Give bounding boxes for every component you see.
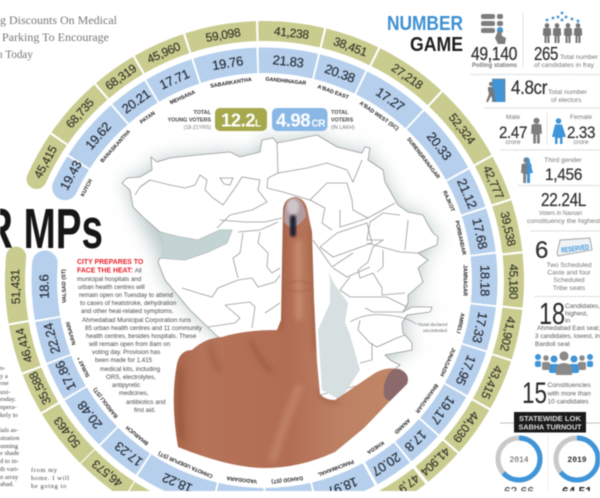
constituency labels: BHAVNAGAR bbox=[414, 382, 439, 414]
outer ring values: 59,098 bbox=[205, 25, 242, 45]
sea: gulf of khambhat bbox=[318, 272, 360, 400]
constituency labels: BHARUCH bbox=[125, 424, 150, 446]
stat: constituencies with more than ten candidates: with more than bbox=[546, 390, 591, 398]
outer ring values: 46,414 bbox=[13, 326, 35, 364]
stat: navsari voters: constituency the highest bbox=[527, 218, 600, 225]
cropped left column article: n- bbox=[0, 365, 5, 372]
outer ring values: 38,451 bbox=[331, 34, 370, 60]
stat: male electors: 2.47 bbox=[499, 123, 527, 142]
inner ring values: 19.17 bbox=[428, 393, 458, 427]
cropped left column article: e shade bbox=[0, 450, 19, 457]
constituency labels: NAVSARI bbox=[65, 320, 78, 346]
total young voters callout: YOUNG VOTERS bbox=[168, 118, 211, 124]
stat: candidates highest lowest: Bardoli seat bbox=[535, 341, 570, 348]
stat: candidates in fray: 265 bbox=[534, 44, 558, 64]
donut: 2014 turnout: 2014 bbox=[509, 456, 529, 465]
outer ring values: 41,902 bbox=[497, 315, 518, 353]
stat: reserved seats: Caste and four bbox=[547, 270, 591, 276]
constituency labels: MEHSANA bbox=[169, 90, 197, 106]
stat: navsari voters: Voters in Navsari bbox=[539, 210, 582, 217]
heat advisory article: been made for 1,415 bbox=[95, 357, 153, 364]
constituency labels: RAJKOT bbox=[441, 190, 456, 213]
footnote leader: surat uncontested: *Surat declared bbox=[417, 322, 448, 327]
stat: female electors: Female bbox=[570, 114, 592, 121]
icon: reserved sign: RESERVED bbox=[561, 242, 590, 255]
heading: statewide lok sabha turnout bbox=[500, 412, 600, 432]
constituency labels: PANCHMAHAL bbox=[316, 458, 354, 477]
total voters callout bbox=[272, 108, 355, 131]
constituency labels: A'BAD EAST bbox=[316, 84, 350, 101]
outer ring values: 52,324 bbox=[446, 111, 478, 147]
heat advisory article: antibiotics and bbox=[126, 399, 166, 406]
inner ring values: 18.6 bbox=[36, 274, 52, 299]
ink mark bbox=[290, 215, 296, 237]
constituency labels: CHHOTA UDEPUR (ST) bbox=[157, 450, 214, 479]
donut: 2019 turnout: 2019 bbox=[567, 456, 587, 465]
headline fragment: top-left story deck: g Discounts On Medical bbox=[0, 13, 118, 27]
cropped quote column: from my bbox=[31, 467, 58, 474]
cropped left column article: y a bbox=[0, 373, 8, 380]
headline fragment: top-left story deck: Parking To Encourage bbox=[2, 30, 109, 44]
constituency labels: KUTCH bbox=[80, 178, 94, 198]
constituency labels: BARDOLI (ST) bbox=[92, 386, 120, 419]
inner ring values: 17.95 bbox=[453, 353, 479, 387]
icon: voting machine bbox=[481, 14, 506, 44]
inner ring values: 17.27 bbox=[373, 84, 407, 114]
outer ring values: 46,573 bbox=[89, 457, 125, 490]
cropped left column article: th vari- bbox=[0, 466, 19, 473]
constituency labels: JUNAGADH bbox=[438, 347, 456, 377]
cropped left column article: unning bbox=[0, 443, 19, 450]
stat: candidates highest lowest: 18 bbox=[539, 296, 565, 331]
inner ring: total voters per constituency in lakh bbox=[38, 48, 492, 494]
heat advisory article bbox=[77, 259, 203, 414]
title: number game bbox=[387, 15, 464, 52]
stat: third gender bbox=[521, 157, 582, 184]
total voters callout: 4.98CR bbox=[276, 110, 326, 130]
constituency labels: SURAT * bbox=[76, 355, 92, 378]
heat advisory article: to cases of heatstroke, dehydration bbox=[80, 300, 177, 307]
cropped quote column: home. I will bbox=[31, 475, 70, 482]
stat: third gender: Third gender bbox=[544, 157, 582, 164]
cropped quote column: be going to bbox=[31, 483, 67, 490]
inner ring values: 19.76 bbox=[211, 53, 244, 73]
cropped left column article: esday. bbox=[0, 396, 16, 403]
inner ring values: 19.43 bbox=[57, 158, 85, 193]
title: number game: NUMBER bbox=[387, 12, 463, 35]
footnote leader: surat uncontested bbox=[350, 315, 448, 333]
stat: candidates in fray bbox=[534, 12, 599, 69]
total voters callout: VOTERS bbox=[331, 118, 354, 124]
stat: electors: 4.8cr bbox=[511, 78, 548, 99]
constituency labels: DAHOD (ST) bbox=[271, 474, 303, 484]
heading: statewide lok sabha turnout: SABHA TURNOUT bbox=[518, 422, 582, 432]
stat: candidates highest lowest: Candidates, bbox=[565, 303, 600, 310]
heat advisory article: will remain open from 8am on bbox=[88, 341, 171, 348]
constituency labels: SABARKANTHA bbox=[210, 77, 252, 90]
donut: 2019 turnout bbox=[556, 438, 598, 498]
inner ring values: 20.33 bbox=[424, 129, 455, 163]
heat advisory article: ORS, electrolytes, bbox=[106, 374, 156, 381]
cropped left column article: d to in- bbox=[0, 458, 19, 465]
stat: reserved seats: Scheduled bbox=[553, 277, 585, 284]
heat advisory article: 85 urban health centres and 11 community bbox=[85, 325, 203, 332]
constituency labels: JAMNAGAR bbox=[462, 265, 468, 296]
constituency labels: KHEDA bbox=[365, 439, 385, 455]
stat: navsari voters: 22.24L bbox=[541, 190, 586, 210]
stat: candidates in fray: Total number bbox=[560, 54, 599, 61]
constituency labels: VALSAD (ST) bbox=[61, 269, 68, 303]
inner ring values: 18.18 bbox=[478, 265, 492, 296]
headline fragment: top-left story deck bbox=[0, 13, 118, 61]
photo: inked finger hand bbox=[174, 197, 408, 468]
cropped left column article: abad. bbox=[0, 481, 14, 488]
title: number game: GAME bbox=[410, 33, 463, 56]
stat: constituencies with more than ten candidates: 10 candidates bbox=[548, 398, 589, 406]
heat advisory article: Ahmedabad Municipal Corporation runs bbox=[82, 317, 191, 324]
stat: female electors bbox=[552, 114, 595, 146]
nail bbox=[284, 198, 306, 227]
total voters callout: TOTAL bbox=[331, 110, 349, 116]
stat: male electors: crore bbox=[505, 139, 521, 146]
stat: female electors: 2.33 bbox=[567, 123, 595, 142]
inner ring values: 19.62 bbox=[82, 119, 114, 152]
total young voters callout: TOTAL bbox=[194, 110, 212, 116]
finger crease bbox=[292, 280, 306, 292]
cropped left column article: stration bbox=[0, 435, 20, 442]
cropped left column article: uxi- bbox=[0, 389, 10, 396]
outer ring values: 45,180 bbox=[506, 264, 521, 300]
outer ring values: 68,735 bbox=[63, 95, 97, 131]
total young voters callout: (18-21YRS) bbox=[184, 125, 211, 131]
icon: third gender bbox=[521, 157, 533, 183]
outer ring values: 43,415 bbox=[478, 363, 505, 402]
icon: crowd with leader bbox=[535, 351, 593, 375]
constituency labels: ANAND bbox=[393, 417, 411, 435]
stat: reserved seats bbox=[535, 237, 592, 292]
outer ring values: 42,777 bbox=[480, 163, 507, 202]
stat: constituencies with more than ten candidates: 15 bbox=[522, 377, 547, 410]
stat: candidates highest lowest: highest, bbox=[565, 310, 588, 318]
heat advisory article: remain open on Tuesday to attend bbox=[79, 292, 173, 299]
district boundaries bbox=[135, 143, 418, 363]
stat: polling stations: Polling stations bbox=[472, 62, 517, 69]
stat: candidates in fray: of candidates in fray bbox=[534, 62, 595, 69]
inner ring values: 22.24 bbox=[40, 321, 63, 355]
stat: female electors: crore bbox=[573, 139, 589, 146]
inner ring values: 17.86 bbox=[52, 358, 79, 393]
stat: reserved seats: 6 bbox=[535, 237, 548, 264]
inner ring values: 20.38 bbox=[323, 61, 357, 86]
hand shading bbox=[180, 205, 340, 462]
constituency labels bbox=[61, 76, 468, 484]
outer ring values: 47,9 bbox=[396, 471, 422, 496]
inner ring values: 21.83 bbox=[272, 52, 304, 70]
heat advisory article: FACE THE HEAT: All bbox=[77, 268, 142, 274]
donut: 2014 turnout bbox=[498, 438, 540, 498]
constituency labels: PORBANDAR bbox=[453, 220, 467, 256]
heat advisory article: voting day. Provision has bbox=[92, 349, 160, 356]
outer ring values: 45,415 bbox=[31, 143, 60, 181]
stat: male electors bbox=[499, 114, 542, 146]
outer ring values: 68,319 bbox=[102, 61, 140, 93]
stat: reserved seats: Two Scheduled bbox=[546, 262, 592, 269]
total voters callout: (IN LAKH) bbox=[331, 125, 355, 131]
icon: person entering door bbox=[486, 79, 505, 102]
footnote leader: surat uncontested: uncontested bbox=[423, 328, 447, 333]
outer ring values: 44,039 bbox=[450, 409, 482, 446]
heat advisory article: urban health centres will bbox=[78, 284, 145, 291]
stat: candidates highest lowest bbox=[534, 302, 600, 347]
inner ring values: 17.33 bbox=[469, 311, 491, 344]
total young voters callout: 12.2L bbox=[221, 110, 261, 130]
inner ring values bbox=[36, 52, 493, 498]
constituency labels: VADODARA bbox=[226, 474, 257, 484]
inner ring values: 20.48 bbox=[74, 398, 105, 432]
stat: reserved seats: Tribe seats bbox=[553, 285, 586, 292]
cropped left column article bbox=[0, 365, 20, 488]
icon: candidates bbox=[543, 12, 582, 43]
stat: navsari voters bbox=[527, 190, 600, 225]
outer ring values: 35,588 bbox=[26, 369, 54, 407]
heading: statewide lok sabha turnout: STATEWIDE LOK bbox=[519, 414, 582, 423]
stat: polling stations bbox=[471, 14, 517, 69]
constituency labels: SURENDRANAGAR bbox=[405, 137, 441, 180]
inner ring values: 17.23 bbox=[112, 439, 146, 470]
outer ring values: 51,431 bbox=[8, 269, 23, 304]
stat: constituencies with more than ten candidates: Constituencies bbox=[548, 382, 591, 389]
outer ring values: 41,238 bbox=[273, 24, 310, 42]
cropped left column article: ose bbox=[0, 380, 9, 387]
stat: electors bbox=[486, 78, 588, 104]
outer ring values: 45,960 bbox=[145, 39, 183, 66]
stat: electors: of electors bbox=[551, 97, 582, 104]
icon: male bbox=[531, 118, 542, 144]
heat advisory article: first aid. bbox=[134, 407, 156, 414]
outer ring values: 39,538 bbox=[498, 210, 519, 248]
inner ring values: 17.71 bbox=[157, 66, 192, 92]
heat advisory article: medical kits, including bbox=[100, 366, 161, 373]
constituency labels: BANASKANTHA bbox=[100, 129, 132, 164]
heat advisory article: municipal hospitals and bbox=[77, 276, 142, 283]
heat advisory article: medicines, bbox=[119, 390, 149, 397]
constituency labels: AMRELI bbox=[455, 312, 465, 334]
heat advisory article: and other heat-related symptoms. bbox=[81, 308, 174, 315]
outer ring values: 50,463 bbox=[51, 414, 83, 451]
stat: polling stations: 49,140 bbox=[471, 44, 517, 64]
inner ring values: 20.07 bbox=[369, 449, 403, 479]
cropped quote column bbox=[31, 467, 70, 490]
inner ring values: 17.8 bbox=[402, 427, 430, 455]
heat advisory article: CITY PREPARES TO bbox=[77, 259, 144, 266]
constituency labels: A'BAD WEST (SC) bbox=[358, 101, 400, 132]
constituency labels: GANDHINAGAR bbox=[265, 76, 307, 87]
cropped left column article: npera- bbox=[0, 404, 17, 411]
cropped left column article: n array bbox=[0, 474, 19, 481]
heat advisory article: health centres, besides hospitals. These bbox=[86, 333, 197, 340]
outer ring values: 41,904 bbox=[417, 444, 453, 479]
gujarat map bbox=[122, 135, 448, 400]
inner ring values: 20.21 bbox=[119, 86, 153, 116]
heat advisory article: antipyretic bbox=[112, 382, 140, 389]
stat: male electors: Male bbox=[506, 114, 520, 121]
stat: third gender: 1,456 bbox=[545, 165, 582, 184]
thumb nail bbox=[384, 369, 408, 401]
stat: candidates highest lowest: in bbox=[565, 318, 570, 324]
sea: gulf of kutch bbox=[160, 230, 232, 260]
inner ring values: 21.12 bbox=[454, 176, 480, 211]
inner ring values: 17.68 bbox=[469, 217, 491, 250]
inner ring values: 18.22 bbox=[160, 470, 195, 496]
cropped left column article: ials as- bbox=[0, 427, 18, 434]
total young voters callout bbox=[168, 108, 267, 131]
outer ring values: 27,218 bbox=[389, 61, 426, 92]
constituency labels: PATAN bbox=[139, 111, 157, 126]
stat: constituencies with more than ten candidates bbox=[522, 377, 591, 410]
stat: electors: Total number bbox=[548, 89, 588, 96]
icon: female bbox=[552, 118, 566, 144]
cropped left column article: kely to bbox=[0, 412, 18, 419]
